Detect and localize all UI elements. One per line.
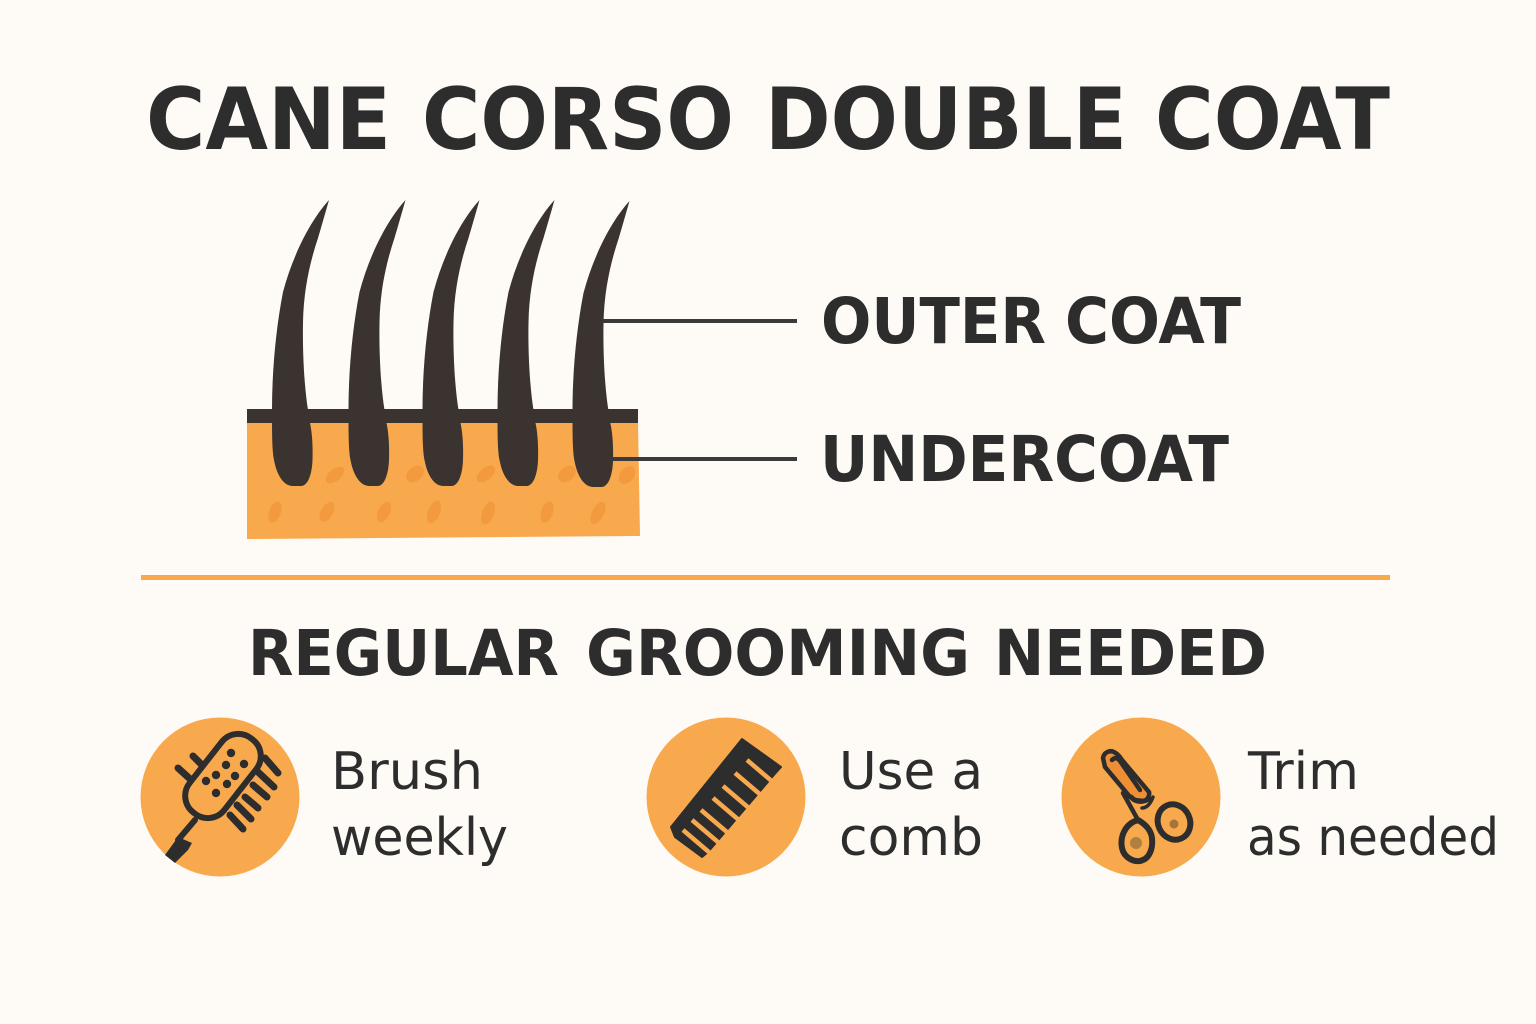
icon: scissors [1062,718,1220,876]
undercoat label: UNDERCOAT [820,423,1229,496]
title: CANE [146,70,391,170]
brush label [331,742,508,868]
grooming heading [248,617,1267,690]
trim label [1247,742,1499,868]
title: DOUBLE [765,70,1127,170]
skin follicle marks [266,462,639,526]
comb label: comb [839,808,983,868]
grooming heading: GROOMING [586,617,970,690]
grooming heading: REGULAR [248,617,559,690]
outer coat label: COAT [1065,285,1241,358]
skin block [247,421,640,539]
trim label: Trim [1247,742,1359,802]
title: CORSO [422,70,734,170]
hair 4 [498,200,554,486]
undercoat leader line [612,457,797,461]
hair 2 [348,200,406,486]
outer coat leader line [602,319,797,323]
comb label [839,742,983,868]
coat diagram [247,200,797,539]
outer coat label: OUTER [821,285,1046,358]
hair 1 [272,200,329,486]
outer coat label [821,285,1241,358]
skin surface line [247,409,638,423]
trim label: as needed [1247,808,1499,868]
grooming heading: NEEDED [994,617,1267,690]
title [146,70,1390,170]
hair 5 [572,201,630,487]
hair 3 [422,200,480,486]
brush label: Brush [331,742,483,802]
divider [141,575,1390,580]
brush label: weekly [331,808,508,868]
title: COAT [1155,70,1390,170]
icon: brush [140,718,300,876]
comb label: Use a [839,742,983,802]
icon: comb [646,718,806,876]
